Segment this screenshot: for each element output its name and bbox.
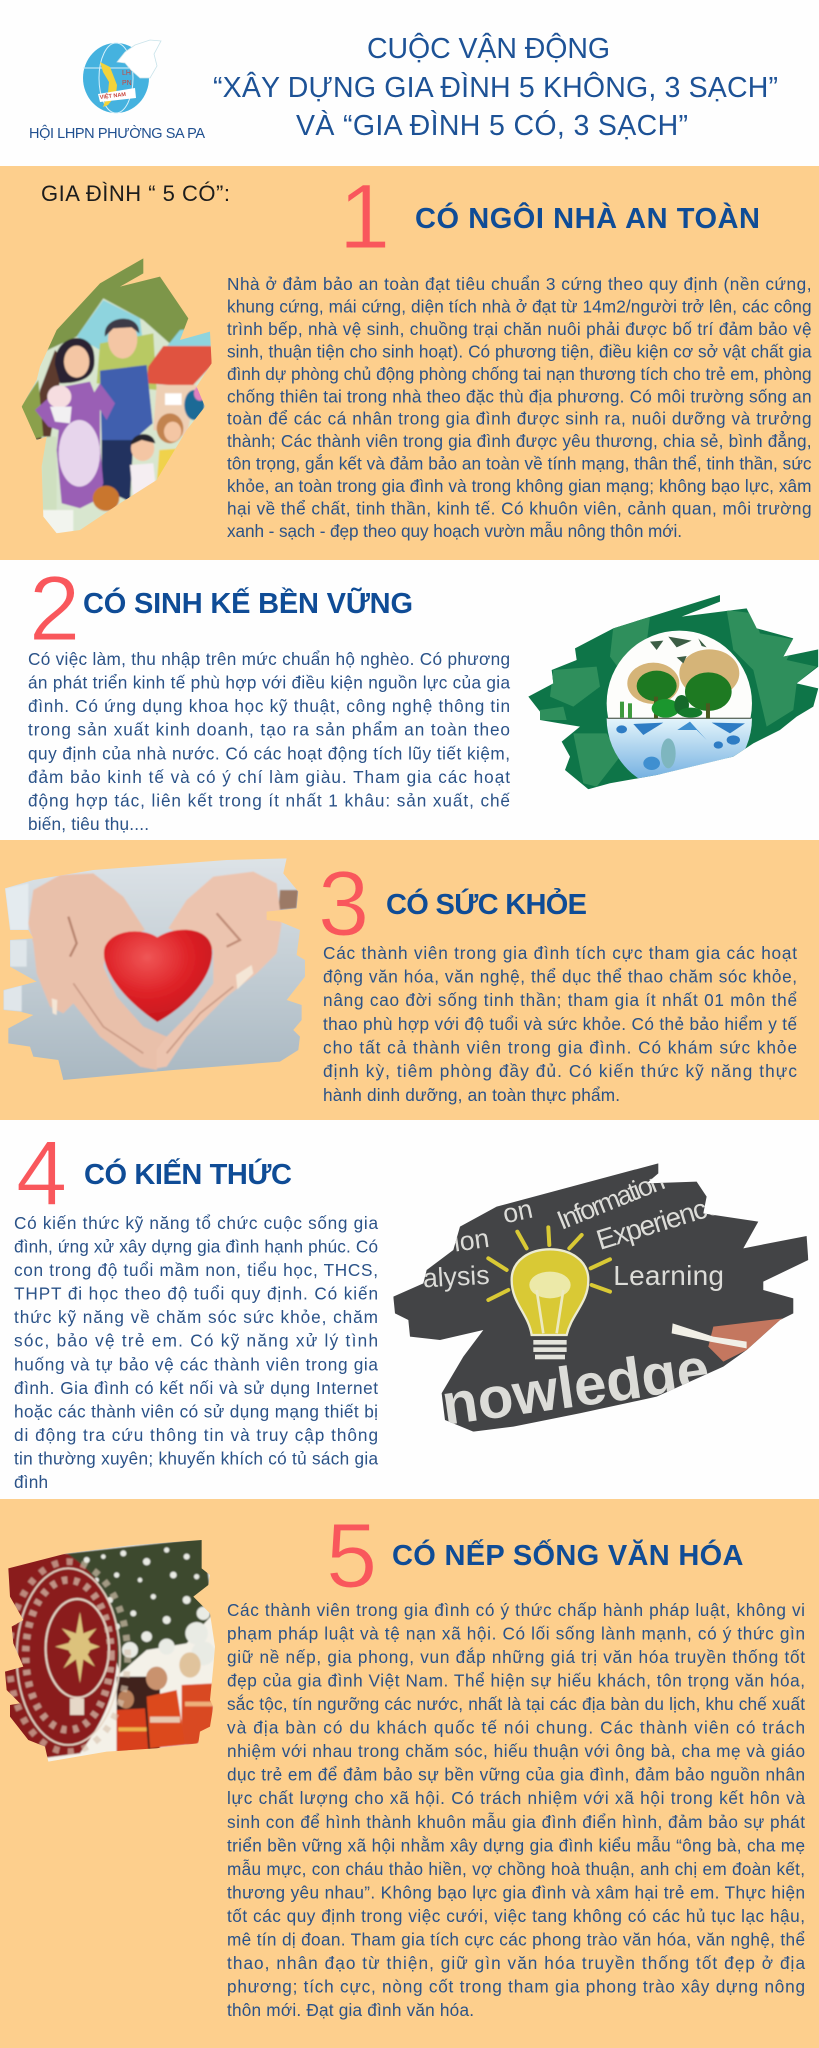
body text 4: thức kỹ năng về chăm sóc sức khỏe, chăm — [14, 1307, 378, 1327]
body text 5: dục trẻ em để đảm bảo sự bền vững của gia đình, đảm bảo nguồn nhân — [227, 1765, 805, 1785]
body text 3: thao phù hợp với độ tuổi và sức khỏe. Có thẻ bảo hiểm y tế — [323, 1014, 797, 1034]
body text 1: toàn để các cá nhân trong gia đình được sinh ra, nuôi dưỡng và trưởng — [227, 409, 812, 429]
body text 4: đình, ứng xử xây dựng gia đình hạnh phúc. Có — [14, 1236, 378, 1256]
body text 5: và địa bàn có du khách quốc tế nói chung. Các thành viên có trách — [227, 1718, 805, 1738]
number 2: 2 — [29, 558, 80, 660]
title: CUỘC VẬN ĐỘNG — [367, 33, 610, 65]
body text 1: trình bếp, nhà vệ sinh, chuồng trại chăn nuôi phải được bố trí đảm bảo vệ — [227, 319, 812, 339]
panel: 1 safe home — [0, 166, 819, 560]
illustration: chalkboard light bulb: nowledge — [438, 1336, 713, 1438]
body text 2: đảm bảo kinh tế và có ý chí làm giàu. Tham gia các hoạt — [28, 767, 510, 787]
body text 4: đình. Gia đình có kết nối và sử dụng Internet — [14, 1378, 378, 1398]
panel: 2 sustainable livelihood — [28, 576, 818, 832]
body text 5: nhiệm với nhau trong chăm sóc, hiếu thuận với ông bà, cha mẹ và giáo — [227, 1741, 805, 1761]
illustration: bronze drum and people in red vests — [3, 1537, 220, 1767]
number 4: 4 — [16, 1123, 67, 1225]
body text 5: mẫu mực, con cháu thảo hiền, vợ chồng hoà thuận, anh chị em đoàn kết, — [227, 1859, 805, 1879]
body text 3: động văn hóa, văn nghệ, thể dục thể thao chăm sóc khỏe, — [323, 967, 797, 987]
body text 1: đình dự phòng chủ động phòng chống tai nạn thương tích cho trẻ em, phòng — [227, 364, 812, 384]
body text 2: Có việc làm, thu nhập trên mức chuẩn hộ nghèo. Có phương — [28, 649, 510, 669]
section label: GIA ĐÌNH “ 5 CÓ”: — [41, 181, 230, 206]
body text 4: huống và tự bảo vệ các thành viên trong gia — [14, 1354, 378, 1374]
body text 5: thôn mới. Đạt gia đình văn hóa. — [227, 2000, 474, 2020]
number 3: 3 — [318, 853, 369, 955]
body text 5: lực chất lượng cho xã hội. Có trách nhiệm với xã hội trong kết hôn và — [227, 1788, 805, 1808]
body text 5: mê tín dị đoan. Tham gia tích cực các phong trào văn hóa, văn nghệ, thể — [227, 1929, 805, 1949]
body text 5: Các thành viên trong gia đình có ý thức chấp hành pháp luật, không vi — [227, 1600, 805, 1620]
body text 1: tôn trọng, gắn kết và đảm bảo an toàn về tính mạng, thân thể, tinh thần, sức — [227, 454, 812, 474]
body text 2: quy định của nhà nước. Có các hoạt động tích lũy tiết kiệm, — [28, 743, 510, 763]
body text 2: trong sản xuất kinh doanh, tạo ra sản phẩm an toàn theo — [28, 720, 510, 740]
bulb — [512, 1249, 588, 1335]
number 1: 1 — [339, 166, 390, 268]
body text 5: phạm pháp luật và tệ nạn xã hội. Có lối sống lành mạnh, có ý thức gìn — [227, 1624, 805, 1644]
number 5: 5 — [326, 1505, 377, 1607]
panel: 3 health — [0, 840, 819, 1120]
body text 5: giữ nề nếp, gia phong, vun đắp những giá trị văn hóa truyền thống tốt — [227, 1647, 805, 1667]
heading 2: CÓ SINH KẾ BỀN VỮNG — [83, 586, 413, 620]
title: “XÂY DỰNG GIA ĐÌNH 5 KHÔNG, 3 SẠCH” — [213, 72, 778, 104]
body text 1: Nhà ở đảm bảo an toàn đạt tiêu chuẩn 3 cứng theo quy định (nền cứng, — [227, 274, 812, 294]
icon: women's union logo — [83, 40, 161, 113]
body text 5 — [227, 1600, 805, 2020]
icon: women's union logo: VIỆT NAM — [99, 90, 127, 101]
body text 4: tin thường xuyên; khuyến khích có tủ sách gia — [14, 1448, 378, 1468]
heading 4: CÓ KIẾN THỨC — [84, 1157, 292, 1191]
heading 1: CÓ NGÔI NHÀ AN TOÀN — [415, 201, 760, 235]
illustration: chalkboard light bulb: Learning — [613, 1260, 724, 1291]
illustration: family in front of house — [17, 253, 217, 540]
title: VÀ “GIA ĐÌNH 5 CÓ, 3 SẠCH” — [296, 110, 688, 142]
body text 3: Các thành viên trong gia đình tích cực tham gia các hoạt — [323, 943, 797, 963]
body text 3 — [323, 943, 797, 1105]
body text 5: thương yêu nhau”. Không bạo lực gia đình và xâm hại trẻ em. Thực hiện — [227, 1882, 805, 1902]
body text 1 — [227, 274, 812, 541]
body text 1: khỏe, an toàn trong gia đình và trong không gian mạng; không bạo lực, xâm — [227, 476, 812, 496]
illustration: chalkboard light bulb: Information — [553, 1165, 669, 1236]
illustration: chalkboard light bulb: Experience — [593, 1189, 724, 1256]
body text 1: sinh, thuận tiện cho sinh hoạt). Có phương tiện, điều kiện cơ sở vật chất gia — [227, 341, 812, 361]
body text 2: đình. Có ứng dụng khoa học kỹ thuật, công nghệ thông tin — [28, 696, 510, 716]
illustration: green ecosystem globe — [527, 590, 819, 793]
body text 5: đẹp của gia đình Việt Nam. Thể hiện sự hiếu khách, tôn trọng văn hóa, — [227, 1671, 805, 1691]
heading 3: CÓ SỨC KHỎE — [386, 887, 587, 921]
body text 1: khung cứng, mái cứng, diện tích nhà ở đạt từ 14m2/người trở lên, các công — [227, 296, 812, 316]
illustration: chalkboard light bulb: alysis — [422, 1260, 490, 1293]
body text 5: sắc tộc, tín ngưỡng các nước, nhất là tại các địa bàn du lịch, khu chế xuất — [227, 1694, 805, 1714]
body text 3: cho tất cả thành viên trong gia đình. Có khám sức khỏe — [323, 1037, 797, 1057]
body text 1: thành; Các thành viên trong gia đình được yêu thương, chia sẻ, bình đẳng, — [227, 431, 812, 451]
body text 5: phương; tích cực, nòng cốt trong tham gia phong trào xây dựng nông — [227, 1976, 805, 1996]
illustration: hands holding red heart — [0, 857, 307, 1083]
body text 4: con trong độ tuổi mầm non, tiểu học, THCS, — [14, 1260, 378, 1280]
body text 4 — [14, 1213, 378, 1492]
body text 4: di động tra cứu thông tin và truy cập thông — [14, 1425, 378, 1445]
illustration: chalkboard light bulb: on — [500, 1194, 535, 1229]
body text 2: án phát triển kinh tế phù hợp với điều kiện nguồn lực của gia — [28, 673, 510, 693]
body text 2 — [28, 649, 510, 834]
body text 2: động hợp tác, liên kết trong ít nhất 1 khâu: sản xuất, chế — [28, 790, 510, 810]
illustration: chalkboard light bulb: ion — [452, 1223, 491, 1258]
body text 4: đình — [14, 1472, 48, 1492]
title — [213, 33, 778, 142]
logo caption: HỘI LHPN PHƯỜNG SA PA — [29, 125, 205, 142]
body text 4: sóc, bảo vệ trẻ em. Có kỹ năng xử lý tình — [14, 1331, 378, 1351]
body text 5: thao, nhân đạo từ thiện, giữ gìn văn hóa truyền thống tốt đẹp ở địa — [227, 1953, 805, 1973]
body text 3: hành dinh dưỡng, an toàn thực phẩm. — [323, 1085, 620, 1105]
body text 3: nâng cao đời sống tinh thần; tham gia ít nhất 01 môn thể — [323, 990, 797, 1010]
body text 2: biến, tiêu thụ.... — [28, 814, 149, 834]
body text 1: hại về thể chất, tinh thần, kinh tế. Có khuôn viên, cảnh quan, môi trường — [227, 498, 812, 518]
body text 5: triển bền vững xã hội nhằm xây dựng gia đình kiểu mẫu “ông bà, cha mẹ — [227, 1835, 805, 1855]
icon: women's union logo: LH — [122, 70, 131, 77]
body text 4: hoặc các thành viên có sử dụng mạng thiết bị — [14, 1401, 378, 1421]
body text 1: chống thiên tai trong nhà theo đặc thù địa phương. Có môi trường sống an — [227, 386, 812, 406]
header panel — [0, 0, 819, 166]
panel: 5 cultured lifestyle — [0, 1499, 819, 2048]
body text 4: THPT đi học theo độ tuổi quy định. Có kiến — [14, 1284, 378, 1304]
icon: women's union logo: PN — [122, 80, 132, 87]
body text 5: tốt các quy định trong việc cưới, việc tang không có các hủ tục lạc hậu, — [227, 1906, 805, 1926]
panel: 4 knowledge — [14, 1142, 808, 1488]
heading 5: CÓ NẾP SỐNG VĂN HÓA — [392, 1538, 744, 1572]
body text 5: sinh con để hình thành khuôn mẫu gia đình điển hình, đảm bảo sự phát — [227, 1812, 805, 1832]
body text 3: định kỳ, tiêm phòng đầy đủ. Có kiến thức kỹ năng thực — [323, 1061, 797, 1081]
body text 4: Có kiến thức kỹ năng tổ chức cuộc sống gia — [14, 1213, 378, 1233]
illustration: chalkboard light bulb — [390, 1160, 813, 1438]
body text 1: xanh - sạch - đẹp theo quy hoạch vườn mẫu nông thôn mới. — [227, 521, 682, 541]
